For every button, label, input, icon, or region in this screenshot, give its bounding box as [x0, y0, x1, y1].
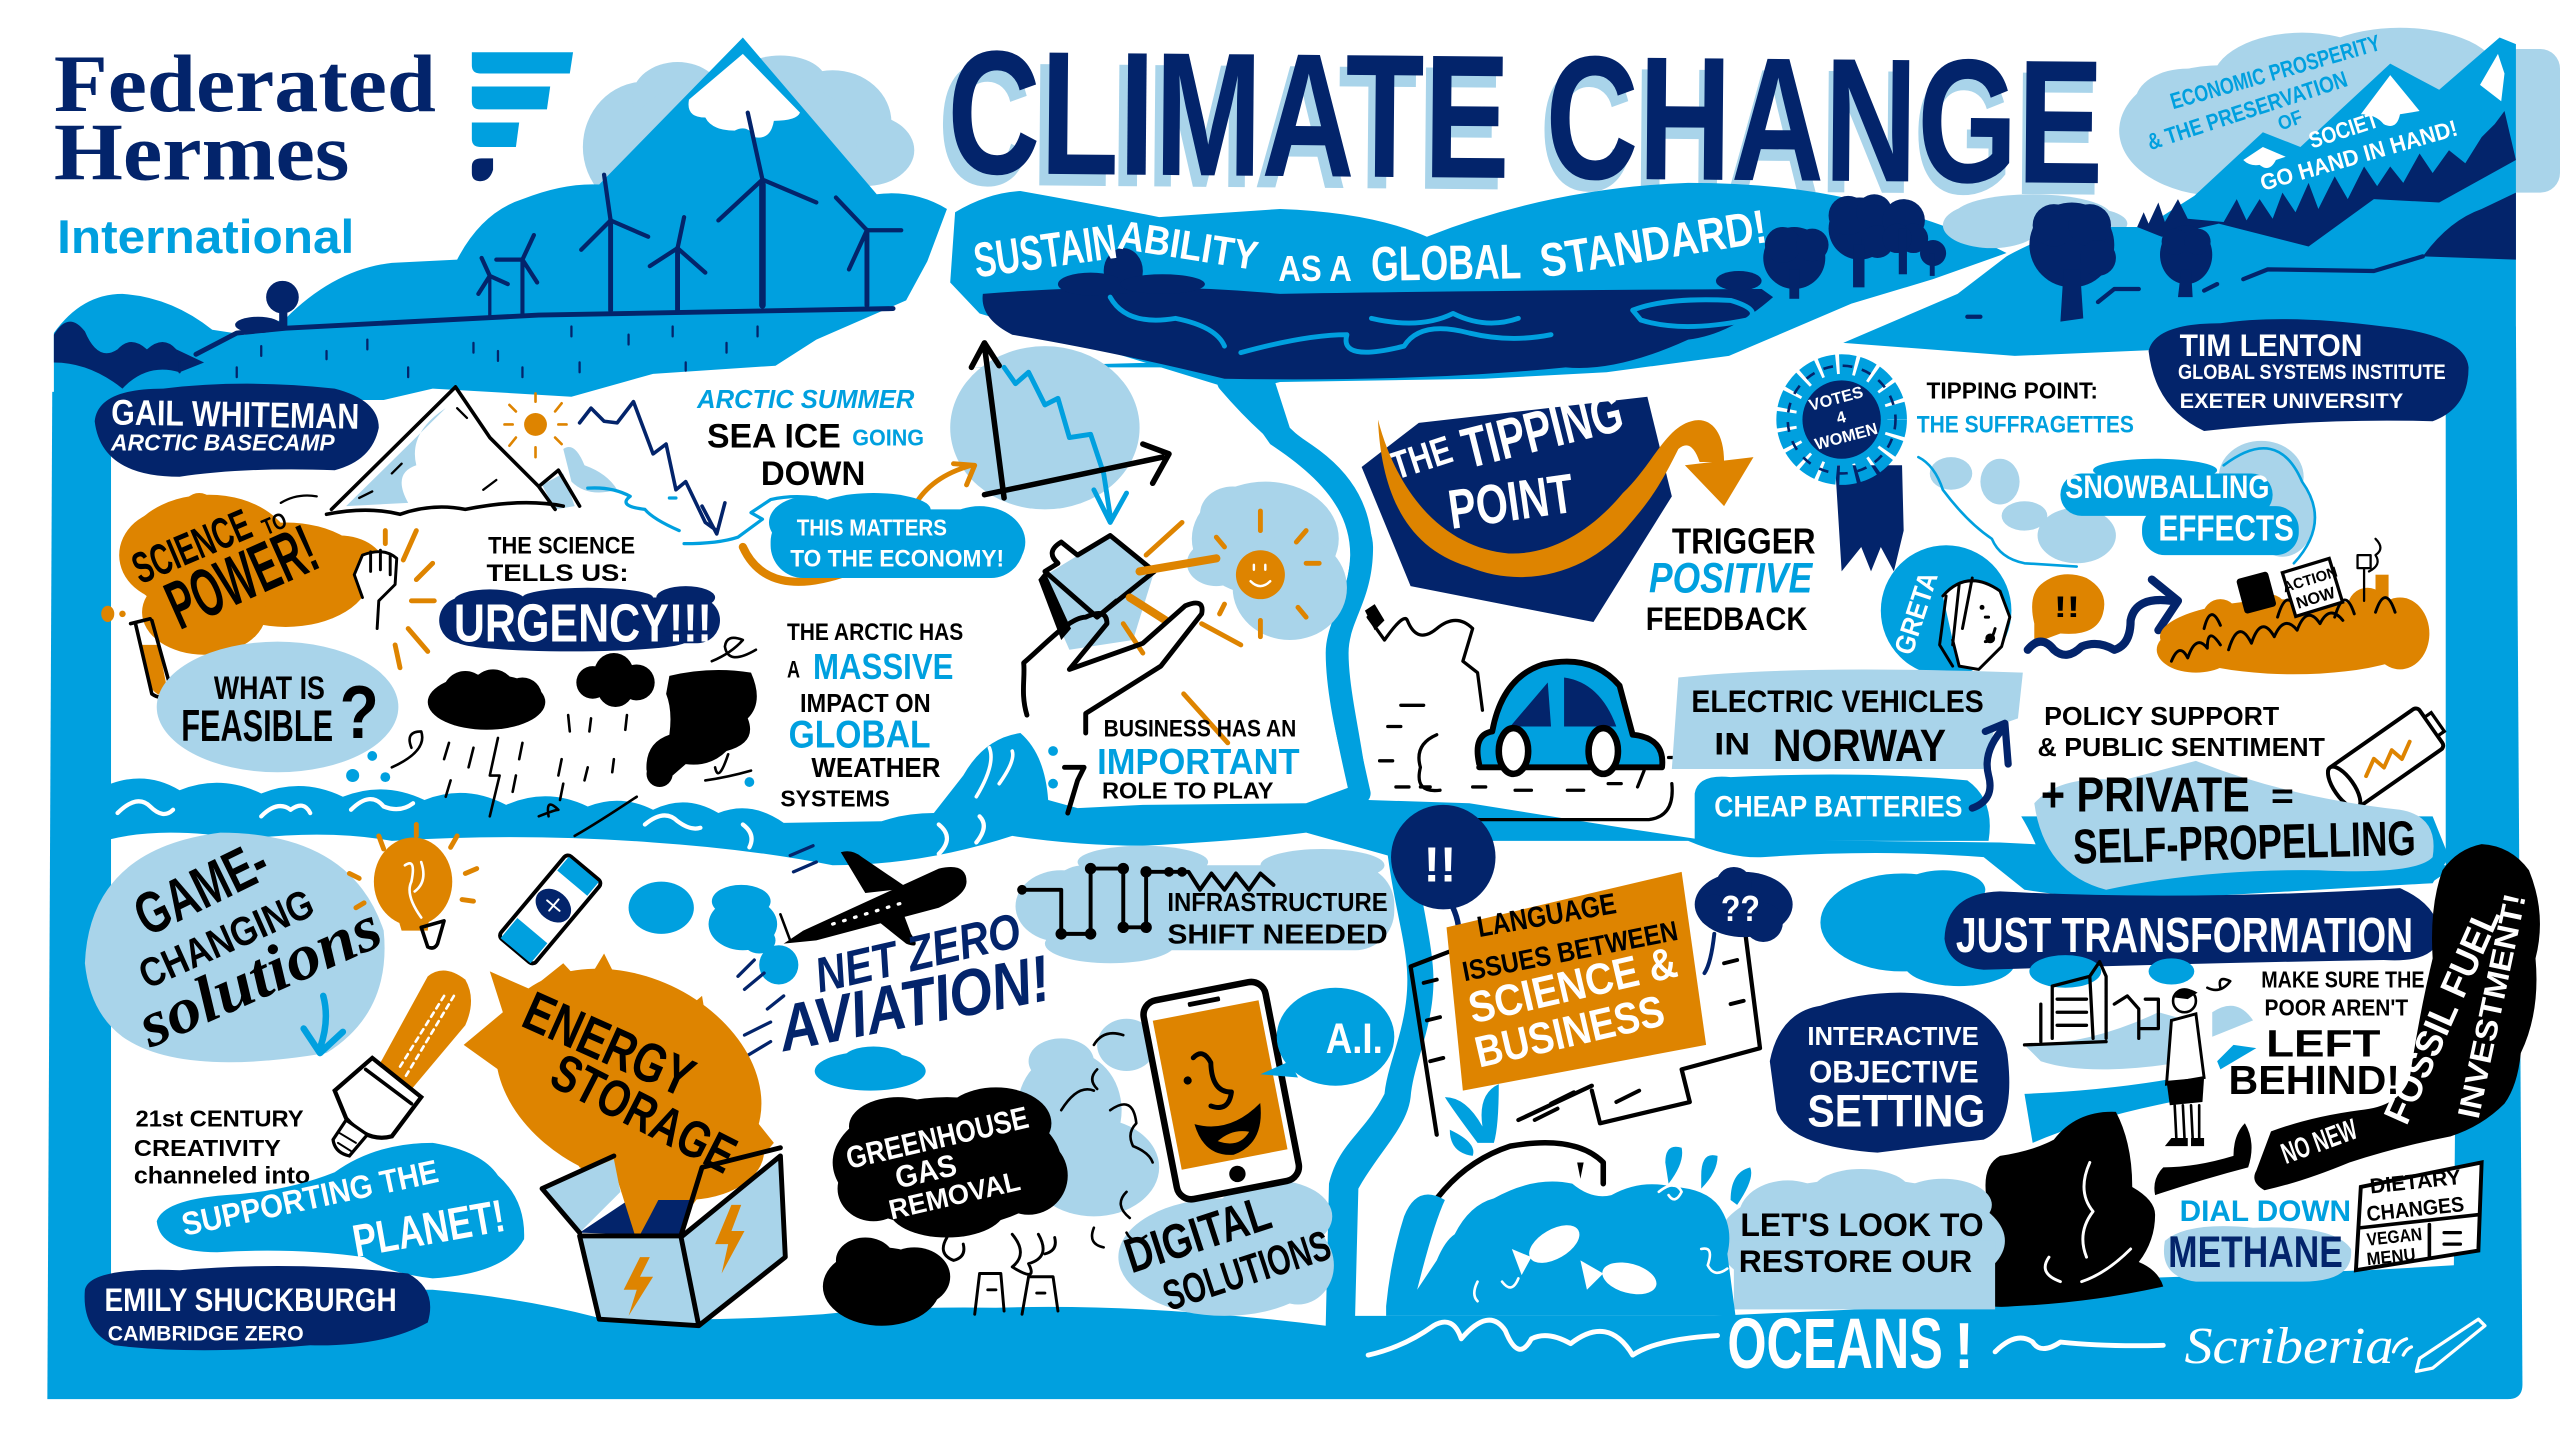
arrow: navy up — [1972, 723, 2008, 808]
text: economic prosperity — [2144, 29, 2460, 196]
text: the science tells us: TELLS US: — [487, 560, 629, 587]
name tag: Tim Lenton: EXETER UNIVERSITY — [2180, 390, 2403, 413]
text: policy support — [2038, 701, 2325, 762]
speech bubble: A.I. — [1260, 988, 1394, 1086]
text: 21st century creativity — [134, 1106, 310, 1190]
smoke: no new fossil fuel investment: FOSSIL FUEL — [2375, 901, 2508, 1130]
text: trigger positive feedback — [1646, 520, 1816, 637]
icon: wallet in hand — [1023, 536, 1241, 743]
callout: restore our — [1718, 1169, 2005, 1309]
callout: dial down methane — [2164, 1195, 2351, 1282]
icon: battery — [2322, 702, 2452, 813]
text: economic prosperity: GO HAND IN HAND! — [2257, 115, 2460, 196]
box: interactive objective setting: INTERACTIVE — [1807, 1021, 1979, 1051]
small tree — [235, 281, 299, 333]
callout: snowballing effects: SNOWBALLING — [2065, 468, 2269, 505]
box: interactive objective setting: OBJECTIVE — [1809, 1054, 1979, 1089]
callout: what is feasible — [157, 642, 398, 772]
logo wordmark — [54, 38, 436, 198]
icon: sun — [504, 393, 567, 457]
smoke: no new fossil fuel investment: NO NEW — [2277, 1113, 2362, 1171]
smoke: no new fossil fuel investment: INVESTMENT! — [2451, 891, 2533, 1121]
callout: dial down methane: METHANE — [2168, 1228, 2343, 1277]
text: 21st century creativity: CREATIVITY — [134, 1135, 281, 1161]
portrait: Greta: GRETA — [1888, 568, 1944, 658]
heading: sustainability: STANDARD! — [1536, 200, 1770, 288]
icon: greenhouse gas removal cloud: GAS — [892, 1147, 960, 1195]
text: arctic summer: DOWN — [761, 455, 865, 493]
text: trigger positive feedback: FEEDBACK — [1646, 600, 1808, 637]
snow cap — [689, 54, 800, 138]
text: oceans with wave swooshes: ! — [1954, 1309, 1974, 1382]
name tag: Gail Whiteman — [95, 384, 379, 477]
callout: urgency: URGENCY!!! — [454, 594, 712, 654]
text: make sure the poor: POOR AREN'T — [2264, 995, 2408, 1021]
wave splash — [976, 746, 1084, 813]
callout: infrastructure shift needed: INFRASTRUCTURE — [1167, 887, 1388, 917]
name tag: Tim Lenton — [2149, 319, 2469, 431]
text: tipping point suffragettes: TIPPING POINT: — [1927, 377, 2098, 403]
callout: science to power: TO — [258, 507, 291, 540]
icon: electric car — [1365, 604, 1685, 820]
callout: science to power: POWER! — [154, 510, 329, 644]
callout: game-changing solutions — [85, 829, 392, 1062]
box: electric vehicles in norway: NORWAY — [1773, 720, 1946, 771]
box: electric vehicles in norway: IN — [1714, 726, 1750, 761]
panel: blue frame — [47, 327, 2522, 1399]
callout: game-changing solutions: GAME- — [124, 829, 279, 949]
bushes — [54, 322, 204, 389]
callout: supporting the planet: PLANET! — [349, 1190, 509, 1267]
trees — [1763, 194, 1946, 299]
text: make sure the poor — [2229, 967, 2424, 1103]
icon: votes for women rosette: 4 — [1834, 408, 1848, 428]
callout: restore our: RESTORE OUR — [1739, 1244, 1972, 1279]
icon: factory — [943, 1234, 1058, 1314]
name tag: Emily Shuckburgh — [85, 1266, 430, 1350]
heading: sustainability: GLOBAL — [1371, 235, 1522, 292]
box: cheap batteries: CHEAP BATTERIES — [1714, 790, 1962, 823]
table: dietary changes: CHANGES — [2365, 1193, 2465, 1226]
landscape: right hills and mountains — [1843, 28, 2560, 356]
icon: protest crowd — [2157, 539, 2429, 674]
text: 21st century creativity: 21st CENTURY — [136, 1106, 304, 1132]
melting ice — [563, 447, 816, 544]
box: interactive objective setting — [1770, 993, 2009, 1153]
icon: greenhouse gas removal cloud: GREENHOUSE — [843, 1100, 1032, 1176]
table: dietary changes: DIETARY — [2369, 1166, 2462, 1198]
box inner — [580, 1200, 694, 1236]
panel: language, transformation and oceans section — [1368, 805, 2540, 1384]
text: business has an important role: ROLE TO PLAY — [1102, 777, 1273, 803]
text: arctic summer — [696, 384, 924, 493]
panel: upper-left white area — [111, 367, 1350, 823]
blue hill and mountain — [54, 38, 947, 428]
icon: energy storage box: ENERGY — [514, 980, 704, 1109]
callout: supporting the planet — [157, 1143, 524, 1278]
box: private self-propelling: = — [2271, 775, 2294, 816]
text: economic prosperity: & THE PRESERVATION — [2144, 66, 2351, 155]
icon: raised fist — [354, 550, 397, 629]
text: tipping point suffragettes: THE SUFFRAGETTES — [1917, 412, 2134, 439]
right trees — [2029, 202, 2212, 322]
text: the arctic has a massive impact: WEATHER — [811, 752, 940, 783]
navy lake — [983, 287, 1773, 379]
text: oceans with wave swooshes: OCEANS — [1727, 1304, 1943, 1384]
title: CLIMATE CHANGE — [937, 25, 2101, 233]
text: arctic summer: ARCTIC SUMMER — [696, 384, 914, 414]
callout: science to power — [119, 493, 434, 668]
icon: iceberg — [281, 387, 580, 514]
text: policy support: POLICY SUPPORT — [2044, 701, 2279, 731]
speech bubble: exclamation marks — [1391, 805, 1496, 939]
callout: infrastructure shift needed: SHIFT NEEDED — [1167, 919, 1388, 950]
logo wordmark: Hermes — [54, 107, 349, 198]
name tag: Emily Shuckburgh: EMILY SHUCKBURGH — [104, 1281, 397, 1318]
text: the arctic has a massive impact: GLOBAL — [789, 714, 931, 757]
text: the arctic has a massive impact: IMPACT ON — [800, 688, 931, 718]
logo subtitle: International — [57, 211, 354, 264]
box: electric vehicles in norway: ELECTRIC VEHICLES — [1691, 684, 1984, 719]
text: economic prosperity: OF — [2275, 106, 2306, 135]
name tag: Gail Whiteman: ARCTIC BASECAMP — [110, 430, 335, 456]
icon: whale and splash — [1389, 1084, 1751, 1306]
chart: falling line — [950, 343, 1169, 522]
callout: matters to the economy: THIS MATTERS — [797, 515, 947, 541]
table: dietary changes: VEGAN — [2366, 1224, 2423, 1250]
box faces — [580, 1236, 699, 1326]
text: policy support: & PUBLIC SENTIMENT — [2038, 732, 2325, 762]
callout: matters to the economy: TO THE ECONOMY! — [790, 546, 1004, 573]
name tag: Gail Whiteman: GAIL WHITEMAN — [111, 391, 360, 437]
landscape: left hills with wind turbines — [54, 38, 947, 428]
icon: energy saving lamp — [333, 971, 471, 1156]
heading: sustainability: SUSTAIN — [970, 215, 1120, 288]
speech bubble: exclamation — [2032, 574, 2104, 643]
clouds: aviation trail — [629, 882, 926, 1091]
lake bush — [1058, 248, 1762, 296]
blue cloud behind heading — [1820, 870, 2015, 986]
name tag: Tim Lenton: TIM LENTON — [2180, 328, 2362, 363]
orange explosion — [460, 927, 797, 1241]
blue hill — [950, 183, 2007, 392]
box: private self-propelling: + PRIVATE — [2041, 768, 2250, 822]
callout: snowballing effects: EFFECTS — [2158, 507, 2294, 548]
title: CLIMATE CHANGE — [947, 14, 2104, 221]
speech bubble: exclamation marks: !! — [1424, 839, 1456, 893]
banner: the tipping point: TIPPING — [1455, 380, 1629, 481]
text: the arctic has a massive impact: SYSTEMS — [780, 786, 890, 812]
icon: greenhouse gas removal cloud: REMOVAL — [886, 1165, 1023, 1225]
panel: upper-right white area — [1257, 327, 2446, 865]
callout: game-changing solutions: CHANGING — [132, 880, 321, 998]
speech bubble: exclamation: !! — [2054, 591, 2080, 624]
callout: digital solutions cloud — [1017, 1019, 1336, 1320]
text: the arctic has a massive impact: MASSIVE — [813, 646, 953, 687]
callout: what is feasible: WHAT IS — [214, 669, 325, 706]
name tag: Emily Shuckburgh: CAMBRIDGE ZERO — [108, 1322, 304, 1345]
callout: supporting the planet: SUPPORTING THE — [178, 1152, 441, 1243]
box: interactive objective setting: SETTING — [1807, 1086, 1985, 1137]
callout: restore our: LET'S LOOK TO — [1740, 1206, 1984, 1243]
icon: sun cloud — [1146, 482, 1347, 640]
text: business has an important role — [1097, 715, 1300, 803]
arrow: orange swoosh — [1378, 420, 1753, 577]
fish — [1512, 1217, 1660, 1300]
box: language issues: BUSINESS — [1470, 986, 1669, 1077]
icon: ocean wave with fish — [1386, 1182, 1736, 1316]
icon: city skyline and person — [2024, 955, 2256, 1146]
portrait: Greta — [1881, 545, 2011, 676]
banner: the tipping point: POINT — [1444, 462, 1578, 541]
logo: Federated Hermes International — [54, 38, 573, 264]
navy treeline — [2137, 111, 2516, 247]
panel: arctic basecamp section — [95, 343, 1347, 854]
text: net zero aviation: NET ZERO — [810, 904, 1026, 1003]
icon: documents — [1411, 895, 1760, 1135]
fist rays — [385, 531, 434, 668]
text: oceans with wave swooshes — [1368, 1304, 2163, 1384]
signature: Scriberia: Scriberia — [2184, 1317, 2393, 1375]
callout: game-changing solutions: solutions — [126, 891, 392, 1062]
circuit line — [1022, 869, 1273, 934]
panel: game-changing solutions section — [85, 824, 1394, 1350]
table: dietary changes — [2356, 1162, 2482, 1270]
text: trigger positive feedback: POSITIVE — [1649, 555, 1814, 602]
water droplets — [346, 751, 754, 787]
panel: tipping point section — [1362, 319, 2469, 902]
icon: small battery — [498, 853, 602, 965]
speech bubble: question marks: ?? — [1721, 888, 1760, 929]
text: the arctic has a massive impact: THE ARCTIC HAS — [787, 619, 963, 646]
icon: energy storage box: STORAGE — [541, 1043, 745, 1185]
box: language issues: ISSUES BETWEEN — [1460, 915, 1680, 987]
speech bubble: question marks — [1695, 867, 1793, 973]
text: make sure the poor: MAKE SURE THE — [2261, 967, 2424, 993]
box: cheap batteries — [1695, 775, 1990, 841]
landscape: global standard lake — [950, 183, 2007, 793]
smoke: dark ground — [1974, 1112, 2252, 1307]
cloud behind mountain — [583, 56, 914, 212]
callout: digital solutions cloud: SOLUTIONS — [1157, 1221, 1336, 1320]
banner: the tipping point: THE — [1385, 428, 1458, 489]
icon: votes for women rosette: VOTES — [1807, 383, 1865, 415]
box: language issues: LANGUAGE — [1475, 887, 1619, 944]
icon: protest crowd: NOW — [2294, 584, 2338, 613]
person — [2165, 989, 2204, 1146]
logo wordmark: Federated — [54, 38, 436, 129]
callout: infrastructure shift needed — [1016, 846, 1394, 963]
callout: science to power: SCIENCE — [125, 500, 259, 594]
signature: Scriberia — [2184, 1317, 2485, 1375]
hand — [1023, 603, 1202, 733]
text: business has an important role: IMPORTANT — [1097, 741, 1300, 782]
text: arctic summer: SEA ICE — [707, 417, 841, 455]
navy bank and path — [2423, 193, 2516, 260]
callout: dial down methane: DIAL DOWN — [2180, 1195, 2351, 1228]
banner: the tipping point — [1362, 380, 1672, 622]
panel: lower-left white area — [111, 833, 1407, 1326]
snow caps — [2243, 54, 2504, 168]
box: electric vehicles in norway — [1672, 670, 2023, 771]
heading: sustainability: ABILITY — [1115, 212, 1261, 279]
icon: light bulb — [349, 824, 477, 948]
wave squiggles — [118, 799, 984, 854]
text: business has an important role: BUSINESS HAS AN — [1104, 715, 1296, 742]
callout: snowballing effects — [1918, 441, 2315, 567]
callout: what is feasible: ? — [340, 670, 379, 754]
box: language issues: SCIENCE & — [1464, 938, 1682, 1033]
icon: greenhouse gas removal cloud — [823, 1087, 1068, 1326]
text: net zero aviation: AVIATION! — [771, 941, 1056, 1065]
blue hills and peaks — [1843, 38, 2516, 356]
logo F mark — [472, 52, 573, 181]
icon: votes for women rosette — [1788, 366, 1904, 571]
icon: storm clouds and rain — [392, 638, 757, 836]
text: economic prosperity: ECONOMIC PROSPERITY — [2167, 29, 2383, 114]
text: the arctic has a massive impact — [780, 619, 963, 812]
text: trigger positive feedback: TRIGGER — [1672, 520, 1816, 561]
arrow: wavy navy — [2028, 580, 2178, 655]
icon: plane — [738, 846, 967, 1061]
panel: lower-right white area — [1355, 841, 2457, 1316]
icon: energy storage box — [460, 927, 797, 1326]
heading: just transformation — [1944, 888, 2439, 970]
icon: protest crowd: ACTION — [2281, 565, 2340, 596]
box: language issues — [1447, 872, 1706, 1091]
text: the arctic has a massive impact: A — [787, 657, 800, 684]
text: economic prosperity: SOCIETY — [2305, 102, 2394, 153]
ground line — [196, 309, 893, 354]
text: 21st century creativity: channeled into — [134, 1163, 310, 1190]
box: private self-propelling: SELF-PROPELLING — [2072, 812, 2416, 875]
icon: smartphone with face — [1141, 979, 1394, 1202]
heading: just transformation: JUST TRANSFORMATION — [1956, 909, 2413, 963]
callout: what is feasible: FEASIBLE — [181, 702, 333, 751]
callout: digital solutions cloud: DIGITAL — [1118, 1186, 1278, 1284]
icon: test tube — [101, 606, 171, 697]
text: the science tells us: THE SCIENCE — [488, 532, 635, 559]
heading: sustainability — [970, 200, 1770, 292]
table: dietary changes: MENU — [2366, 1244, 2416, 1269]
lake ripples — [1110, 297, 1752, 353]
text: the science tells us — [487, 532, 635, 587]
box: private self-propelling — [2021, 761, 2449, 902]
wind turbines — [478, 113, 901, 317]
text: make sure the poor: BEHIND! — [2229, 1057, 2400, 1103]
callout: matters to the economy — [743, 464, 1025, 582]
name tag: Tim Lenton: GLOBAL SYSTEMS INSTITUTE — [2178, 361, 2446, 384]
icon: votes for women rosette: WOMEN — [1813, 420, 1880, 454]
grass ticks — [180, 327, 758, 377]
sky clouds — [1943, 28, 2560, 248]
text: tipping point suffragettes — [1917, 377, 2134, 439]
smoke: no new fossil fuel investment — [2254, 844, 2540, 1190]
text: arctic summer: GOING — [852, 425, 924, 451]
river-like divider — [1228, 382, 1362, 793]
text: make sure the poor: LEFT — [2266, 1022, 2380, 1064]
speech bubble: A.I.: A.I. — [1326, 1015, 1383, 1062]
heading: sustainability: AS A — [1278, 248, 1352, 289]
zigzag down arrow — [580, 402, 725, 534]
